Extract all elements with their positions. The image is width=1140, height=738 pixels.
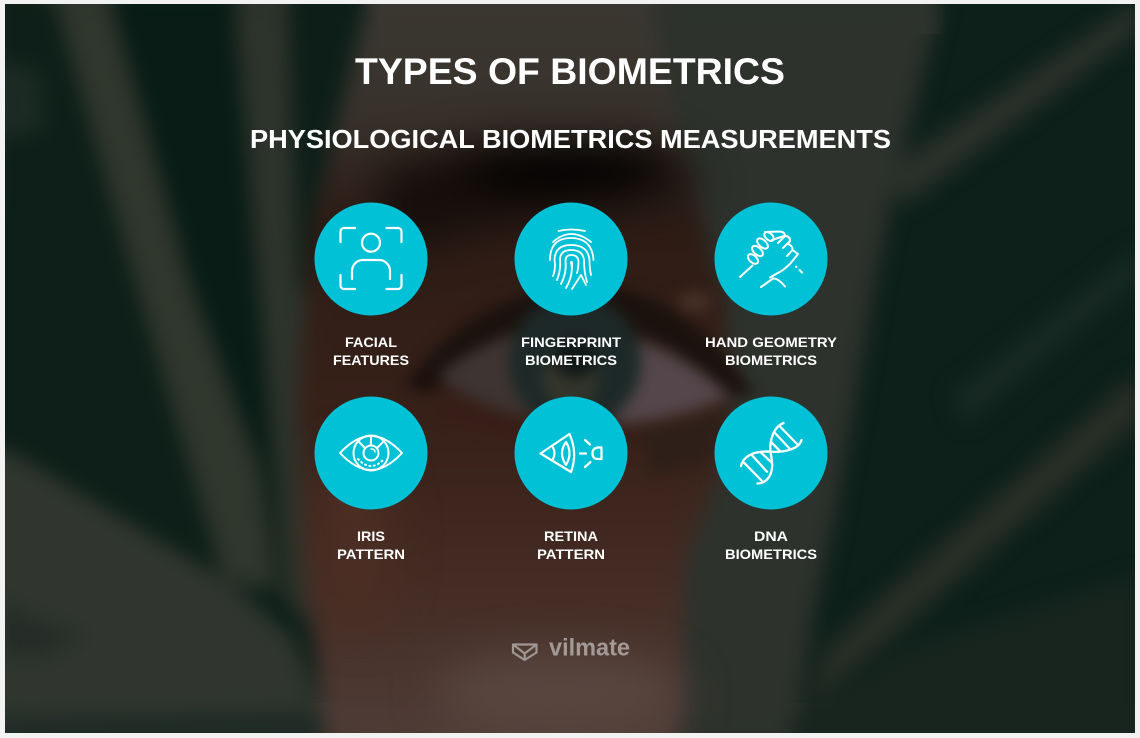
label: BIOMETRICS <box>725 546 817 562</box>
icon: retina scan <box>540 434 602 472</box>
subtitle: PHYSIOLOGICAL BIOMETRICS MEASUREMENTS <box>250 126 891 154</box>
item: iris pattern <box>314 396 428 562</box>
left lower leaf <box>0 445 330 738</box>
icon: face scan <box>340 228 402 289</box>
icon: logo mark <box>513 644 536 660</box>
label: FACIAL <box>345 334 397 350</box>
warm left cheek <box>317 450 393 630</box>
label <box>705 334 838 368</box>
lower lashes <box>640 412 730 475</box>
icon: iris eye <box>340 436 402 470</box>
right strips <box>885 0 1140 205</box>
label <box>725 528 817 562</box>
skin area <box>298 0 730 738</box>
label: DNA <box>754 528 788 544</box>
label <box>537 528 605 562</box>
item: hand geometry biometrics <box>705 202 838 368</box>
upper lash band <box>405 285 755 395</box>
lower lid <box>430 398 715 446</box>
title: TYPES OF BIOMETRICS <box>355 51 785 92</box>
label <box>333 334 409 368</box>
label <box>337 528 405 562</box>
logo: vilmate <box>513 634 630 662</box>
label: PATTERN <box>537 546 605 562</box>
item: fingerprint biometrics <box>514 202 628 368</box>
icon: fingerprint <box>550 230 594 289</box>
label: HAND GEOMETRY <box>705 334 838 350</box>
wordmark: vilmate <box>549 634 630 662</box>
label: RETINA <box>544 528 598 544</box>
item: facial features <box>314 202 428 368</box>
label: FEATURES <box>333 352 409 368</box>
left dark leaves <box>0 0 225 580</box>
iris <box>509 296 641 428</box>
lash highlights <box>678 291 712 313</box>
icon: dna helix <box>741 423 802 484</box>
label <box>521 334 621 368</box>
brow shadow <box>380 145 705 255</box>
label: IRIS <box>357 528 385 544</box>
left light strips <box>55 0 278 590</box>
label: BIOMETRICS <box>525 352 617 368</box>
label: PATTERN <box>337 546 405 562</box>
item: retina pattern <box>514 396 628 562</box>
eye white <box>438 325 732 425</box>
icon: handshake grip <box>740 230 802 287</box>
label: FINGERPRINT <box>521 334 621 350</box>
item: dna biometrics <box>714 396 828 562</box>
tear duct <box>407 372 443 392</box>
label: BIOMETRICS <box>725 352 817 368</box>
cheek <box>435 652 685 738</box>
right leaf light area <box>650 0 942 738</box>
